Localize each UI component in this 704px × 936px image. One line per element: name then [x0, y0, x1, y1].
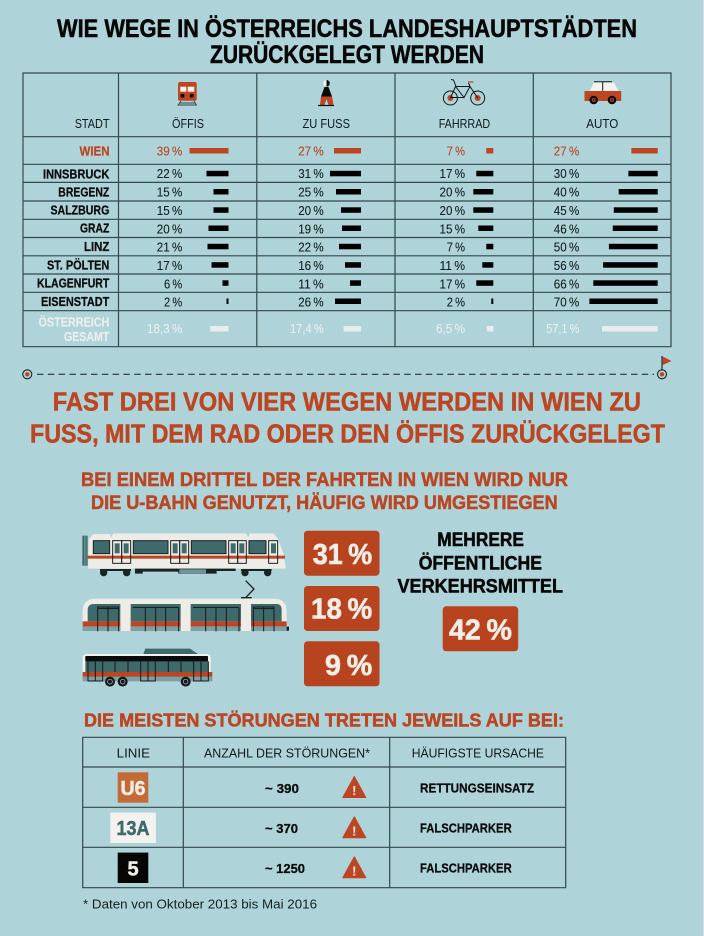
row: 5	[118, 853, 512, 883]
badge: 42 %: 42 %	[449, 614, 512, 646]
row: Österreich gesamt: 17,4 %	[290, 321, 324, 336]
row: Innsbruck: 30 %	[554, 166, 580, 181]
row: 13A: 13A	[116, 818, 150, 840]
row: Österreich gesamt: GESAMT	[64, 329, 109, 344]
row: U6: !	[352, 783, 356, 798]
table grid	[23, 73, 671, 347]
row: Linz: 21 %	[157, 240, 183, 254]
row: Bregenz: 15 %	[157, 184, 183, 200]
title: ZURÜCKGELEGT WERDEN	[210, 40, 484, 69]
row: Österreich gesamt: 18,3 %	[147, 321, 183, 336]
column headers: ZU FUSS	[302, 117, 350, 131]
row: 13A: !	[352, 823, 356, 838]
panel: mode share table	[23, 73, 671, 347]
row: Österreich gesamt: 6,5 %	[436, 321, 465, 336]
row: Bregenz: 40 %	[554, 184, 580, 200]
heading: mehrere öffentliche Verkehrsmittel: MEHRERE	[437, 529, 524, 551]
row: St. Pölten	[47, 257, 658, 273]
icon: tram	[83, 581, 289, 631]
row: Klagenfurt: 17 %	[440, 276, 465, 291]
table grid	[83, 737, 566, 888]
row: Innsbruck	[43, 166, 658, 181]
row: U6	[118, 772, 534, 803]
row: Linz	[84, 239, 658, 254]
badge: U-Bahn 31 %: 31 %	[313, 539, 372, 571]
row: St. Pölten: 56 %	[554, 258, 580, 273]
table headers: HÄUFIGSTE URSACHE	[412, 746, 544, 760]
row: Salzburg: 20 %	[440, 203, 465, 218]
icon: pedestrian	[318, 80, 334, 106]
row: Eisenstadt: 70 %	[554, 294, 580, 310]
row: Wien	[80, 143, 658, 158]
route divider with start point and flag	[23, 356, 672, 379]
row: Wien: 27 %	[554, 144, 580, 158]
badge: Bus 9 %: 9 %	[325, 650, 372, 682]
row: Bregenz: 25 %	[298, 184, 324, 200]
row: Eisenstadt: 26 %	[298, 294, 324, 310]
row: U6: ~ 390	[265, 781, 299, 796]
row: Graz: 19 %	[298, 221, 324, 236]
row: Graz: 20 %	[157, 221, 183, 236]
row: Salzburg: SALZBURG	[50, 202, 109, 218]
row: Linz: 22 %	[298, 240, 324, 254]
table headers: LINIE	[117, 746, 150, 760]
icon: train	[178, 82, 197, 106]
icon: car	[584, 82, 621, 104]
row: Klagenfurt: 6 %	[164, 276, 183, 291]
row: Graz: GRAZ	[80, 221, 109, 236]
table headers	[117, 746, 544, 760]
row: Innsbruck: INNSBRUCK	[43, 166, 110, 181]
row: Eisenstadt	[41, 294, 658, 310]
heading: Störungen: DIE MEISTEN STÖRUNGEN TRETEN JEWEILS AUF BEI:	[84, 710, 564, 731]
row: Wien: WIEN	[80, 143, 110, 158]
title: WIE WEGE IN ÖSTERREICHS LANDESHAUPTSTÄDTEN	[57, 14, 637, 43]
row: Österreich gesamt: 57,1 %	[546, 321, 580, 336]
row: 13A: ~ 370	[265, 821, 298, 836]
column headers: ÖFFIS	[172, 117, 204, 131]
row: Wien: 27 %	[298, 144, 324, 158]
badge: 42 %	[443, 606, 518, 651]
row: Linz: 7 %	[447, 240, 465, 254]
column headers: FAHRRAD	[439, 117, 490, 131]
row: Bregenz: BREGENZ	[58, 184, 109, 200]
row: Klagenfurt: KLAGENFURT	[37, 276, 109, 291]
row: Österreich gesamt: ÖSTERREICH	[38, 315, 109, 330]
row: Bregenz: 20 %	[440, 184, 465, 200]
icon: bicycle	[443, 80, 485, 105]
column headers: STADT	[75, 117, 110, 131]
footnote: * Daten von Oktober 2013 bis Mai 2016	[83, 896, 317, 911]
row: St. Pölten: 11 %	[440, 258, 465, 273]
badge: U-Bahn 31 %	[304, 531, 380, 576]
row: Eisenstadt: 2 %	[164, 294, 183, 310]
row: Salzburg: 20 %	[298, 203, 324, 218]
row: St. Pölten: ST. PÖLTEN	[47, 257, 109, 272]
row: St. Pölten: 17 %	[157, 258, 183, 273]
row: Wien: 7 %	[447, 144, 465, 158]
row: 5: ~ 1250	[265, 861, 305, 876]
row: Österreich gesamt	[38, 315, 658, 344]
badge: Bus 9 %	[304, 641, 380, 686]
row: Graz	[80, 221, 658, 236]
row: Innsbruck: 22 %	[157, 166, 183, 181]
icon: U-Bahn train	[82, 533, 286, 576]
table headers: ANZAHL DER STÖRUNGEN*	[204, 746, 370, 760]
row: Bregenz	[58, 184, 658, 200]
row: Innsbruck: 17 %	[440, 166, 465, 181]
row: 5: FALSCHPARKER	[420, 861, 512, 876]
row: Salzburg: 15 %	[157, 203, 183, 218]
row: Eisenstadt: EISENSTADT	[41, 294, 109, 309]
row: Wien: 39 %	[157, 144, 183, 158]
row: Salzburg: 45 %	[554, 203, 580, 218]
row: Salzburg	[50, 202, 658, 218]
heading: mehrere öffentliche Verkehrsmittel: VERKEHRSMITTEL	[398, 575, 563, 597]
panel: disruption table	[83, 737, 566, 888]
badge: Straßenbahn 18 %	[304, 586, 380, 631]
row: 13A	[110, 813, 512, 843]
icon: bus	[83, 649, 212, 687]
subheading	[81, 469, 568, 514]
row: Klagenfurt	[37, 276, 658, 291]
row: St. Pölten: 16 %	[298, 258, 324, 273]
row: Graz: 46 %	[554, 221, 580, 236]
row: 5: 5	[127, 858, 139, 880]
row: Linz: 50 %	[554, 240, 580, 254]
row: 13A: FALSCHPARKER	[420, 821, 512, 836]
row: Eisenstadt: 2 %	[447, 294, 465, 310]
row: Klagenfurt: 11 %	[298, 276, 324, 291]
column headers	[75, 117, 619, 131]
column headers: AUTO	[586, 117, 619, 131]
subheading: DIE U-BAHN GENUTZT, HÄUFIG WIRD UMGESTIEGEN	[91, 491, 558, 514]
row: Graz: 15 %	[440, 221, 465, 236]
row: U6: U6	[120, 778, 146, 800]
title	[57, 14, 637, 69]
heading: mehrere öffentliche Verkehrsmittel	[398, 529, 563, 597]
row: Innsbruck: 31 %	[298, 166, 324, 181]
row: U6: RETTUNGSEINSATZ	[420, 781, 534, 796]
red headline	[30, 387, 665, 449]
heading: mehrere öffentliche Verkehrsmittel: ÖFFENTLICHE	[419, 551, 542, 574]
red headline: FAST DREI VON VIER WEGEN WERDEN IN WIEN ZU	[53, 387, 641, 417]
row: Linz: LINZ	[84, 239, 109, 254]
row: 5: !	[352, 863, 356, 878]
subheading: BEI EINEM DRITTEL DER FAHRTEN IN WIEN WIRD NUR	[81, 469, 568, 491]
row: Klagenfurt: 66 %	[554, 276, 580, 291]
badge: Straßenbahn 18 %: 18 %	[311, 594, 372, 626]
